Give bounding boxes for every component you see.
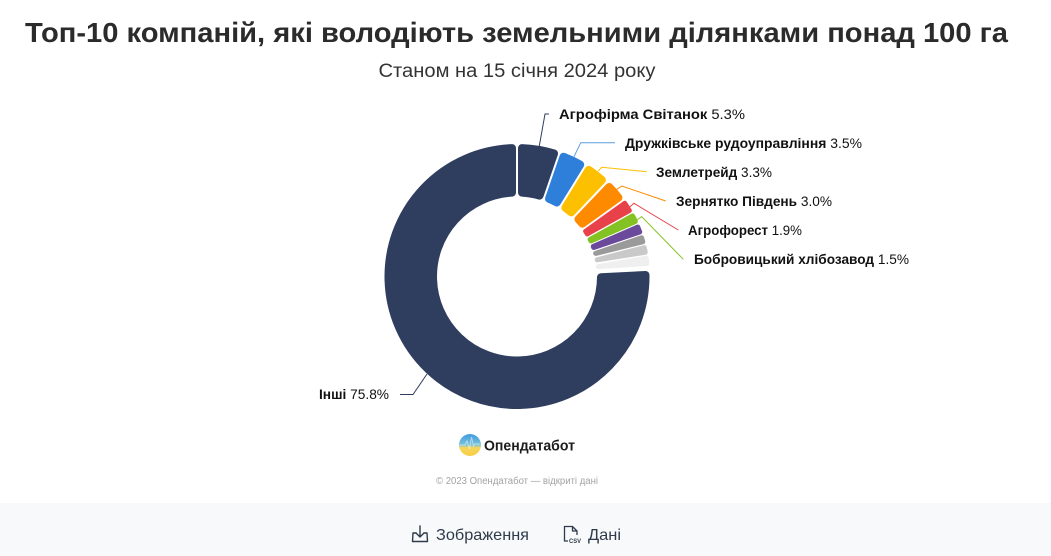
leader line: Бобровицький хлібозавод — [637, 217, 683, 259]
logo wordmark: Опендатабот — [484, 438, 575, 454]
label: Інші: Інші 75.8% — [319, 387, 389, 402]
button: data: Дані — [588, 527, 621, 544]
segment: lightest gray — [598, 258, 647, 267]
donut chart — [388, 148, 647, 405]
copyright: © 2023 Опендатабот — відкриті дані — [436, 475, 598, 487]
footer bar — [0, 503, 1051, 556]
segment: Зернятко Південь — [578, 187, 618, 224]
segment: Інші — [388, 148, 645, 405]
leader line: Дружківське рудоуправління — [574, 143, 615, 157]
label: Бобровицький хлібозавод: Бобровицький хлібозавод 1.5% — [694, 252, 909, 267]
button: image: Зображення — [436, 527, 529, 544]
subtitle: Станом на 15 січня 2024 року — [378, 61, 656, 82]
label: Дружківське рудоуправління: Дружківське рудоуправління 3.5% — [625, 136, 862, 151]
icon: logo circle — [459, 434, 481, 456]
segment: gray — [596, 238, 643, 253]
icon: download — [412, 526, 428, 542]
label: Агрофорест: Агрофорест 1.9% — [688, 223, 802, 238]
label: Зернятко Південь: Зернятко Південь 3.0% — [676, 194, 832, 209]
segment: Агрофірма Світанок — [522, 148, 554, 196]
segment: Бобровицький хлібозавод — [590, 216, 635, 241]
segment: light gray — [597, 248, 645, 260]
label: Землетрейд: Землетрейд 3.3% — [656, 165, 772, 180]
segment: Агрофорест — [585, 203, 630, 234]
icon: csv file — [564, 526, 582, 545]
leader line: Агрофорест — [630, 203, 678, 230]
segment: purple — [593, 227, 640, 248]
leader line: Зернятко Південь — [615, 186, 666, 201]
leader line: Землетрейд — [598, 167, 647, 172]
leader line: Агрофірма Світанок — [539, 114, 549, 146]
segment: Дружківське рудоуправління — [549, 157, 580, 203]
icon: csv file: CSV — [569, 538, 582, 545]
label: Агрофірма Світанок: Агрофірма Світанок 5.3% — [559, 107, 745, 122]
title: Топ-10 компаній, які володіють земельними ділянками понад 100 га — [25, 17, 1008, 48]
logo — [459, 434, 575, 456]
leader line: Інші — [400, 374, 427, 394]
segment: Землетрейд — [565, 170, 602, 212]
